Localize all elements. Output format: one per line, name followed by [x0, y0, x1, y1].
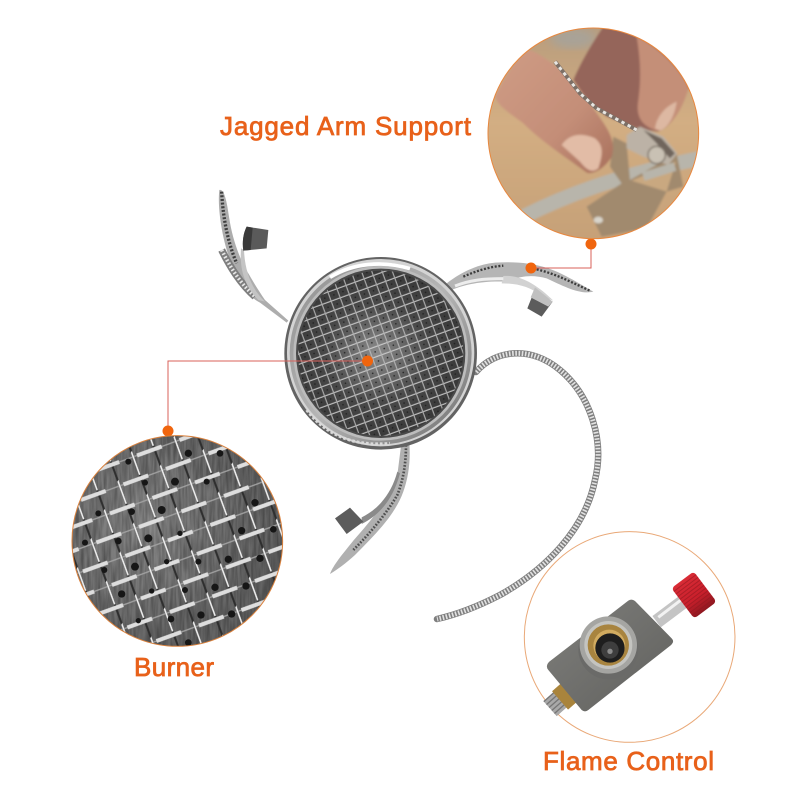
- thumb: [495, 50, 613, 173]
- hinge: [627, 127, 677, 165]
- hose: [523, 158, 700, 217]
- screw fitting: [548, 697, 562, 712]
- perforation holes: [82, 450, 277, 646]
- bracket: [243, 227, 268, 251]
- photo: burner mesh close-up: [68, 433, 288, 653]
- red knob: [671, 571, 717, 619]
- arm: lower: [330, 443, 410, 574]
- heading: Burner: Burner: [134, 652, 214, 682]
- bracket: [587, 137, 683, 237]
- back fingers: [573, 27, 693, 132]
- callout line: burner: [168, 361, 368, 431]
- arm: right: [447, 262, 593, 317]
- icon: main burner stove: [219, 190, 598, 619]
- fitting ring: [578, 619, 638, 679]
- callout line: jagged arm: [531, 244, 591, 268]
- mesh: [297, 270, 467, 437]
- callout dot: burner centre: [362, 356, 373, 366]
- heading: Jagged Arm Support: Jagged Arm Support: [220, 111, 472, 141]
- body: [547, 600, 673, 711]
- brass nut: [557, 687, 573, 705]
- callout dot: burner photo: [162, 426, 174, 436]
- photo: jagged arm support: [488, 28, 700, 240]
- bracket: [527, 293, 553, 317]
- burner head: [284, 257, 477, 450]
- valve stem: [657, 602, 683, 622]
- arm: upper left: [219, 190, 288, 323]
- hose: [437, 353, 598, 619]
- jagged blade: [555, 62, 637, 130]
- photo: flame control valve: [524, 532, 735, 742]
- callout dot: arm photo: [586, 238, 596, 250]
- callout dot: jagged arm: [526, 262, 536, 274]
- heading: Flame Control: Flame Control: [543, 746, 714, 776]
- bracket: [335, 508, 363, 534]
